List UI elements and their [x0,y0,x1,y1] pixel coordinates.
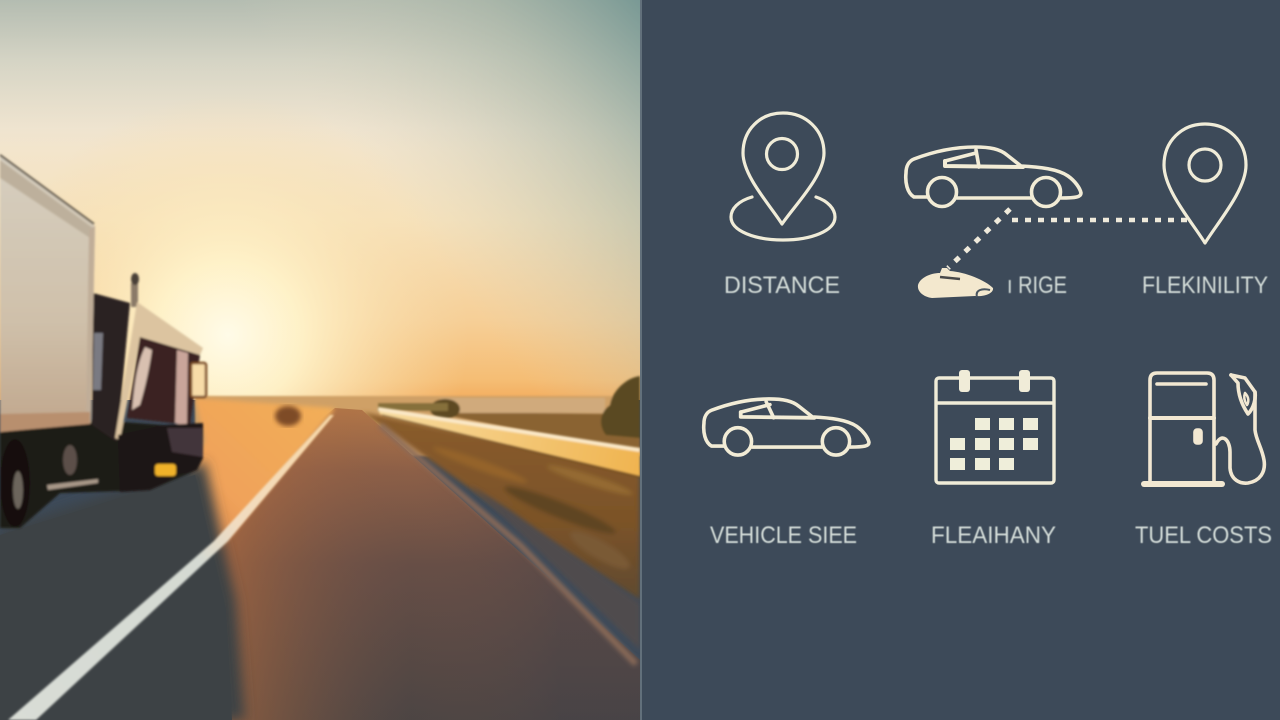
trailer box [0,155,95,432]
exhaust stack [131,273,139,307]
mirror [191,363,206,397]
labels row 1 [724,272,1268,299]
label: range: ı RIGE [1007,272,1067,299]
route dotted line [948,209,1188,268]
step and spring [47,445,98,490]
small filled car [918,268,993,298]
undercarriage [0,420,203,528]
sleeper section [92,293,130,442]
label: flexibility second: FLEAIHANY [931,522,1056,549]
icon: fuel pump [1144,373,1264,484]
trailer base stripe [0,412,90,432]
labels row 2 [710,522,1272,549]
icon: location pin with ring [731,113,835,240]
label: flexibility: FLEKINILITY [1142,272,1268,299]
truck [0,155,206,528]
truck shadow on asphalt [0,462,245,720]
icon: car side view [704,399,869,455]
panel: sunset highway photo [0,0,640,720]
label: vehicle size: VEHICLE SIEE [710,522,857,549]
label: distance: DISTANCE [724,272,840,299]
icon: car with route [906,147,1188,298]
yellow light [155,464,176,476]
cab lower body [118,423,203,492]
icon: location pin [1164,124,1246,243]
cab [115,302,203,440]
icon: calendar [936,370,1054,483]
road surface [218,408,640,720]
lit left shoulder [190,398,336,546]
distant fields and trees [195,376,640,456]
sky [0,0,640,400]
white lane line [8,415,334,720]
guardrail [378,409,640,477]
rear wheel [0,439,30,527]
panel: dark icon panel [640,0,1280,720]
far vehicle [275,406,301,426]
grass verge [362,412,640,600]
